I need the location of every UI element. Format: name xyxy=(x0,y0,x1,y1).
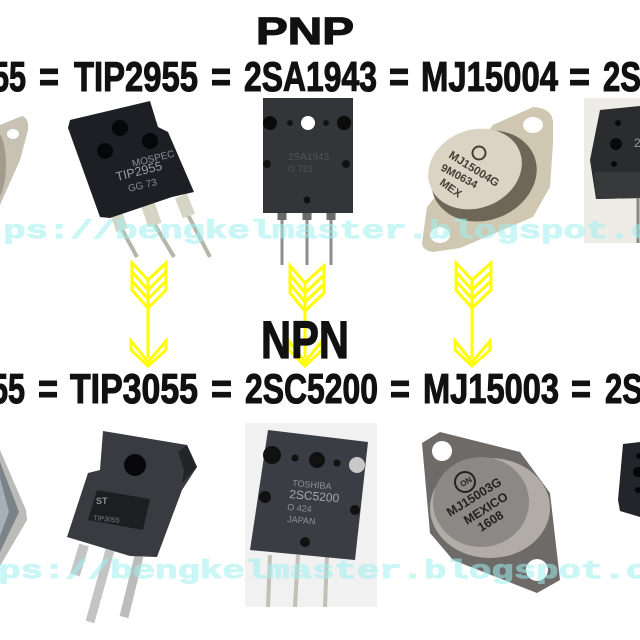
PNP part number row: = xyxy=(569,53,590,100)
transistor: MJ15004 xyxy=(416,107,553,252)
transistor: 2SC5200: O 424 xyxy=(287,502,312,514)
PNP part number row: = xyxy=(39,53,59,100)
transistor: partial metal can, bottom left xyxy=(0,450,27,566)
transistor: MJ15003: MEXICO xyxy=(461,489,511,528)
transistor: 2SC5200 xyxy=(245,423,377,607)
transistor: MJ15004: MEX xyxy=(437,177,464,201)
PNP part number row: MJ15004 xyxy=(421,53,558,100)
NPN part number row: TIP3055 xyxy=(70,365,198,412)
transistor: 2SC5200: 2SC5200 xyxy=(289,487,340,505)
NPN part number row: 2SC5200 xyxy=(245,365,378,412)
NPN part number row: = xyxy=(38,365,58,412)
transistor: MJ15004: 9M0634 xyxy=(439,162,480,192)
arrow: 2SA1943 to 2SC5200 xyxy=(289,266,324,366)
transistor: TIP2955: TIP2955 xyxy=(114,159,164,184)
transistor: TIP2955: MOSPEC xyxy=(131,149,176,170)
NPN part number row: = xyxy=(571,365,591,412)
transistor: 2SA1943: O 723 xyxy=(288,164,313,174)
PNP part number row xyxy=(0,53,640,100)
NPN part number row: = xyxy=(211,365,232,412)
PNP part number row: 2SA1943 xyxy=(244,53,377,100)
title: PNP: PNP xyxy=(256,11,354,53)
transistor: MJ15003 xyxy=(422,432,560,593)
transistor: partial metal can, top left xyxy=(0,116,28,205)
transistor: MJ15003: MJ15003G xyxy=(444,475,504,520)
transistor: 2SC5200: TOSHIBA xyxy=(292,478,332,491)
transistor: partial device, top right xyxy=(584,98,640,243)
transistor: 2SA1943 xyxy=(263,98,353,265)
transistor: TIP3055 xyxy=(67,431,197,622)
transistor: TIP2955: GG 73 xyxy=(127,177,159,195)
transistor: 2SC5200: JAPAN xyxy=(287,514,316,526)
transistor: TIP2955 xyxy=(68,101,210,257)
transistor: MJ15003: 1608 xyxy=(475,508,506,535)
transistor: MJ15003: ON xyxy=(459,475,474,489)
NPN part number row: = xyxy=(390,365,410,412)
PNP part number row: = xyxy=(389,53,409,100)
arrow: TIP2955 to TIP3055 xyxy=(131,263,166,366)
transistor: 2SA1943: 2SA1943 xyxy=(288,152,330,163)
transistor: partial device, bottom right xyxy=(618,442,640,517)
transistor: TIP3055: TIP3055 xyxy=(93,515,120,525)
transistor: MJ15004: MJ15004G xyxy=(446,149,501,190)
title: NPN: NPN xyxy=(261,311,349,370)
NPN part number row xyxy=(0,365,640,412)
arrow: MJ15004 to MJ15003 xyxy=(455,263,491,366)
PNP part number row: = xyxy=(211,53,231,100)
PNP part number row: TIP2955 xyxy=(74,53,198,100)
transistor: TIP3055: ST xyxy=(96,496,108,506)
NPN part number row: MJ15003 xyxy=(423,365,559,412)
